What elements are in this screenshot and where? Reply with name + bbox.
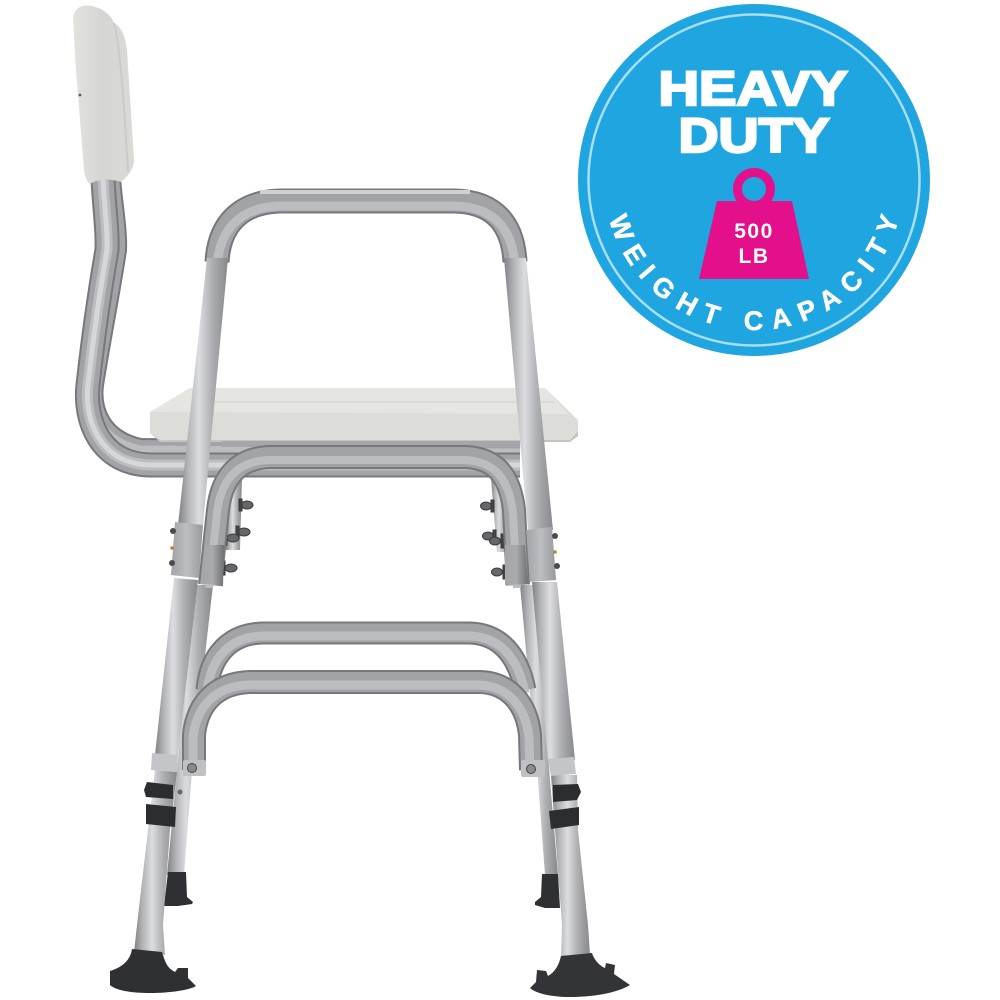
right rubber foot	[530, 953, 630, 997]
icon: weight: LB	[738, 245, 770, 268]
backrest pad	[73, 6, 134, 184]
chair	[73, 6, 630, 997]
height adjustment clips	[144, 782, 581, 829]
rear legs	[167, 585, 558, 875]
badge disc	[578, 4, 930, 356]
icon: weight	[699, 172, 809, 279]
badge: heavy duty	[578, 4, 930, 356]
lower bracket screws	[183, 760, 545, 777]
leg collars	[151, 522, 576, 776]
seat	[150, 388, 578, 442]
front legs	[134, 258, 590, 958]
heading: DUTY	[678, 110, 830, 163]
lower front crossbar	[193, 682, 531, 773]
rear rubber feet	[164, 872, 560, 908]
arm rest top	[217, 192, 515, 267]
curved caption: WEIGHT CAPACITY	[610, 212, 898, 330]
lower rear crossbar	[207, 633, 525, 693]
seat support shadow	[222, 441, 520, 447]
heading	[658, 63, 848, 163]
bolts left	[222, 499, 253, 575]
backrest tube	[87, 178, 520, 465]
left rubber foot	[110, 949, 196, 993]
icon: weight: 500	[734, 220, 774, 243]
bolts right	[480, 500, 506, 579]
heading: HEAVY	[658, 63, 848, 116]
collar screws	[169, 528, 560, 569]
badge ring	[588, 14, 920, 346]
upper arch frame	[209, 457, 518, 588]
inner uprights	[226, 478, 510, 552]
